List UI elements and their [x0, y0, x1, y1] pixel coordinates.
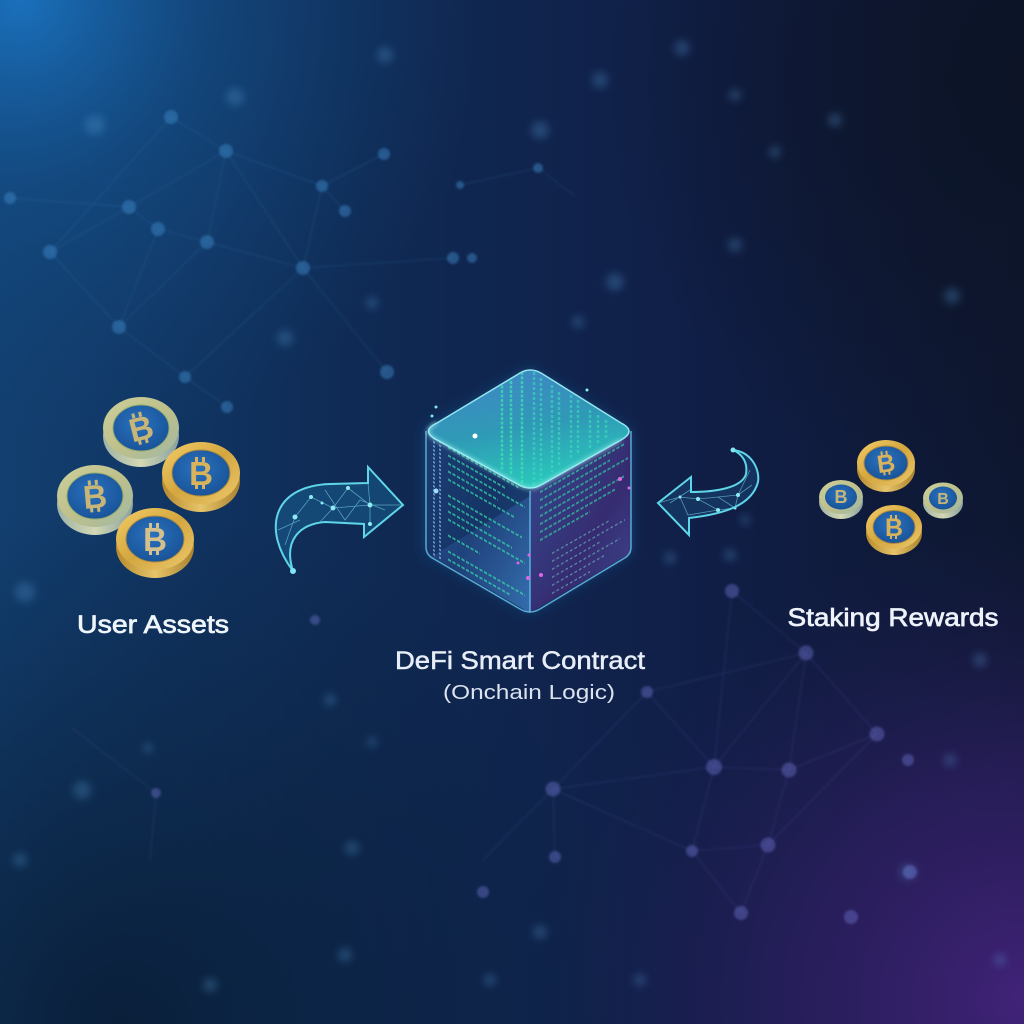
label: defi smart contract: DeFi Smart Contract [395, 647, 645, 675]
label: staking rewards: Staking Rewards [788, 604, 998, 632]
coin: top gold: B [875, 449, 897, 479]
coin: top gold [857, 440, 915, 492]
coin: right gold: B [189, 455, 213, 492]
coin: left pale: B [834, 487, 848, 507]
coin group: user assets [57, 397, 240, 578]
coin: left pale [57, 465, 133, 535]
coin: bottom gold: B [885, 514, 903, 542]
cube glow [426, 368, 631, 613]
cube outline [426, 431, 631, 612]
smart contract cube [426, 368, 631, 643]
coin: bottom gold [116, 508, 194, 578]
cube right face [530, 432, 631, 616]
arrow tail dot [290, 568, 296, 574]
arrow: rewards into contract [658, 448, 758, 535]
coin: left pale: B [82, 477, 109, 516]
label: defi smart contract: (Onchain Logic) [443, 682, 615, 704]
network: upper left [4, 110, 575, 413]
arrow: into contract [276, 467, 403, 574]
coin: right gold [162, 442, 240, 512]
coin: left pale [819, 480, 863, 519]
coin: bottom gold [866, 505, 922, 555]
cube highlight edge [428, 423, 621, 488]
cube left face [427, 432, 530, 613]
network: lower right [72, 584, 917, 924]
arrow tail dot [730, 448, 736, 452]
coin: bottom gold: B [143, 521, 167, 558]
label: user assets: User Assets [77, 611, 229, 639]
coin: right pale: B [937, 491, 949, 508]
coin: top pale: B [125, 408, 157, 449]
coin group: staking rewards [819, 440, 963, 555]
cube sparkles [430, 388, 630, 580]
coin: right pale [923, 482, 963, 518]
cube top face [428, 370, 629, 488]
label: defi smart contract [395, 647, 645, 704]
coin: top pale [103, 397, 179, 467]
